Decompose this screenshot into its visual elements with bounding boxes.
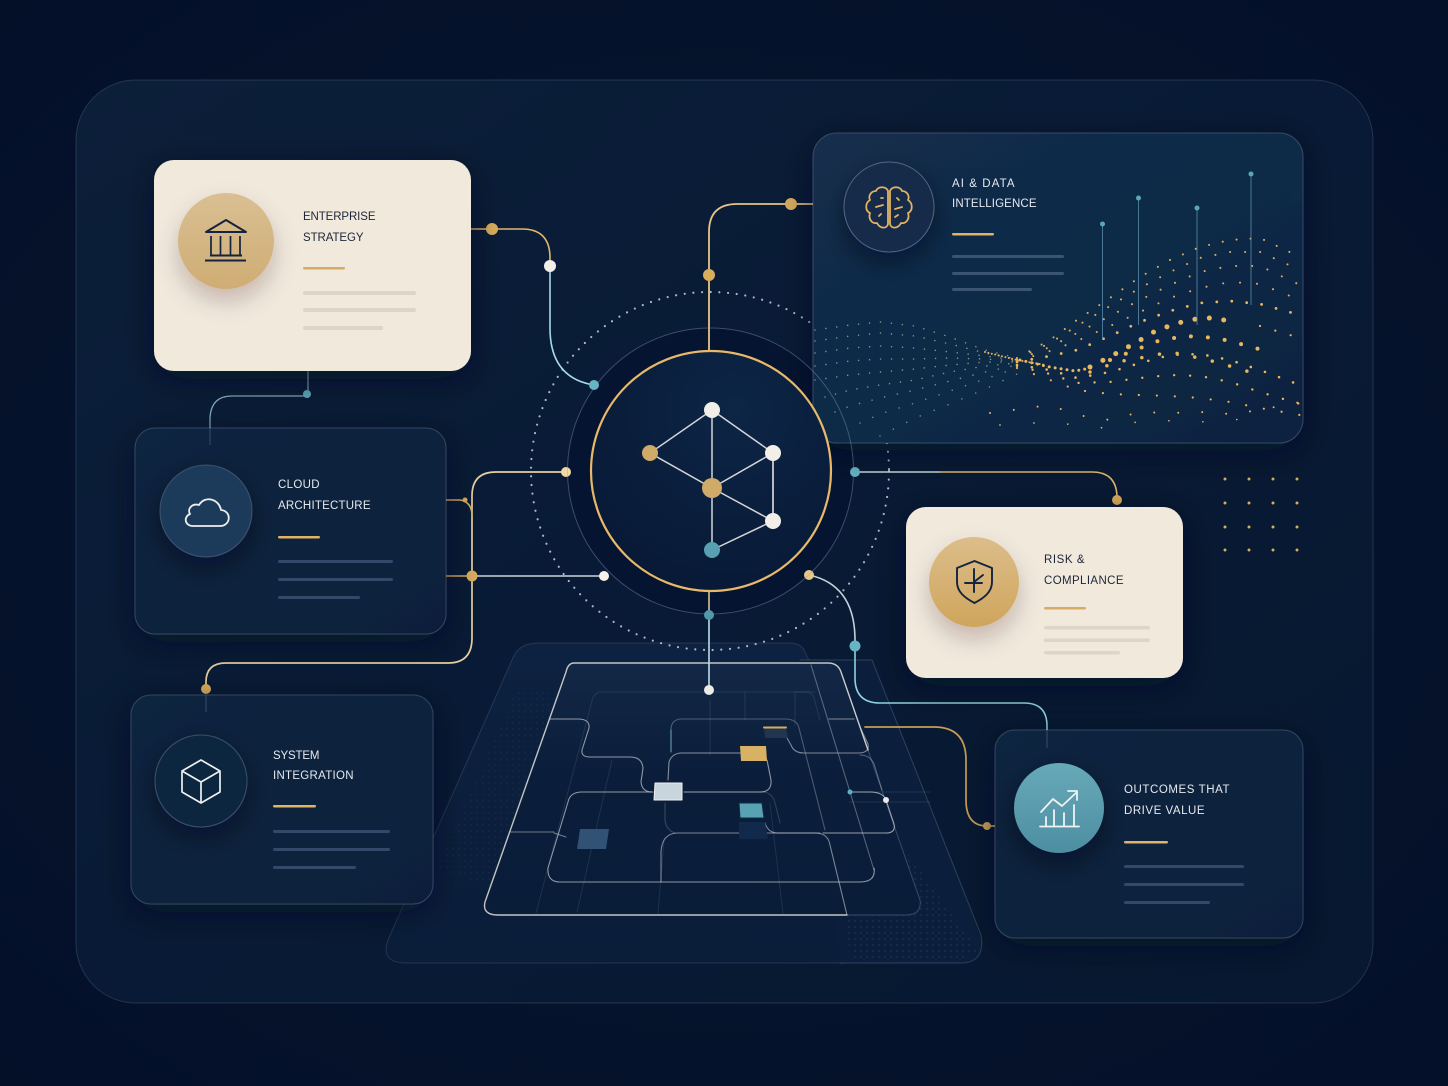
- network nodes: [642, 402, 781, 558]
- connector: platform trunk: [708, 615, 710, 690]
- connector: strategy lower teal: [550, 266, 594, 385]
- dark hub disk: [568, 328, 854, 614]
- module: teal: [739, 803, 764, 818]
- dot grid decoration: [1224, 478, 1298, 552]
- panel: system integration: [131, 695, 433, 904]
- circuit junction dots: [848, 790, 889, 803]
- placeholder text lines: [278, 560, 393, 599]
- heading: risk and compliance: COMPLIANCE: [1044, 575, 1124, 587]
- heading: enterprise strategy: [303, 211, 376, 244]
- panel: cloud architecture: [135, 428, 446, 634]
- connector: cloud branch top: [446, 500, 472, 516]
- accent line: [1044, 607, 1086, 610]
- hub thin ring: [568, 328, 854, 614]
- placeholder text lines: [952, 255, 1064, 291]
- heading: outcomes: [1124, 784, 1230, 817]
- icon: brain: [844, 162, 934, 252]
- connector: platform to outcomes gold: [865, 727, 995, 826]
- heading: risk and compliance: [1044, 554, 1124, 587]
- heading: system integration: [273, 750, 354, 782]
- central hub: [591, 351, 831, 591]
- connector: hub to risk pale: [855, 471, 940, 473]
- accent line: [1124, 841, 1168, 844]
- connector: cloud branch white: [472, 575, 604, 577]
- data spike lines: [1100, 172, 1254, 340]
- connector nodes: [201, 198, 1122, 830]
- circuit traces: [510, 665, 894, 915]
- panel: outcomes that drive value: [995, 730, 1303, 938]
- hub disk: [591, 351, 831, 591]
- icon: shield: [929, 537, 1019, 627]
- icon: cloud: [160, 465, 252, 557]
- placeholder text lines: [1044, 626, 1150, 654]
- main circuit tray: [485, 663, 920, 915]
- accent line: [952, 233, 994, 236]
- heading: AI and data: INTELLIGENCE: [952, 198, 1037, 210]
- module: small gold topped: [764, 728, 788, 738]
- placeholder text lines: [303, 291, 416, 330]
- heading: AI and data: AI & DATA: [952, 178, 1015, 190]
- heading: cloud architecture: ARCHITECTURE: [278, 500, 371, 512]
- icon: bank: [178, 193, 274, 289]
- main panel: [76, 80, 1373, 1003]
- connector: hub to platform: [708, 592, 710, 615]
- connector: strategy to cloud curve: [210, 396, 307, 430]
- connector: strategy to hub: [471, 229, 550, 266]
- connector: hub to outcomes teal: [855, 640, 1047, 748]
- icon: cube: [155, 735, 247, 827]
- accent line: [278, 536, 320, 538]
- connector stubs over dark cards: [206, 428, 1047, 748]
- network edges: [650, 410, 773, 550]
- heading: risk and compliance: RISK &: [1044, 554, 1085, 566]
- heading: enterprise strategy: STRATEGY: [303, 232, 364, 244]
- module: blue: [577, 829, 609, 849]
- heading: enterprise strategy: ENTERPRISE: [303, 211, 376, 223]
- connector: strategy to cloud: [307, 371, 309, 394]
- accent line: [273, 805, 316, 808]
- data wave dots: [815, 238, 1300, 436]
- outer dotted ring: [531, 292, 889, 650]
- faint grid lines: [536, 692, 930, 914]
- heading: AI and data: [952, 178, 1037, 210]
- connector: AI to hub: [709, 204, 813, 350]
- accent line: [303, 267, 345, 270]
- panel: AI and data intelligence: [813, 133, 1303, 443]
- placeholder text lines: [273, 830, 390, 869]
- heading: cloud architecture: CLOUD: [278, 479, 320, 491]
- isometric platform: [386, 643, 982, 963]
- connector: cloud branch gold: [446, 575, 472, 577]
- connector: hub to outcomes pale: [809, 575, 855, 640]
- placeholder text lines: [1124, 865, 1244, 904]
- heading: outcomes: DRIVE VALUE: [1124, 805, 1205, 817]
- module: white: [654, 783, 682, 800]
- module: gold: [740, 746, 767, 761]
- heading: cloud architecture: [278, 479, 371, 512]
- module: dark: [739, 822, 768, 839]
- heading: outcomes: OUTCOMES THAT: [1124, 784, 1230, 796]
- connector: hub to risk gold: [940, 472, 1117, 498]
- heading: system integration: INTEGRATION: [273, 770, 354, 782]
- connector: hub to cloud and system: [206, 472, 566, 689]
- icon: growth chart: [1014, 763, 1104, 853]
- panel: risk and compliance: [906, 507, 1183, 678]
- connector lines: [206, 204, 1117, 826]
- panel: enterprise strategy: [154, 160, 471, 371]
- platform base plates: [386, 643, 982, 963]
- heading: system integration: SYSTEM: [273, 750, 320, 762]
